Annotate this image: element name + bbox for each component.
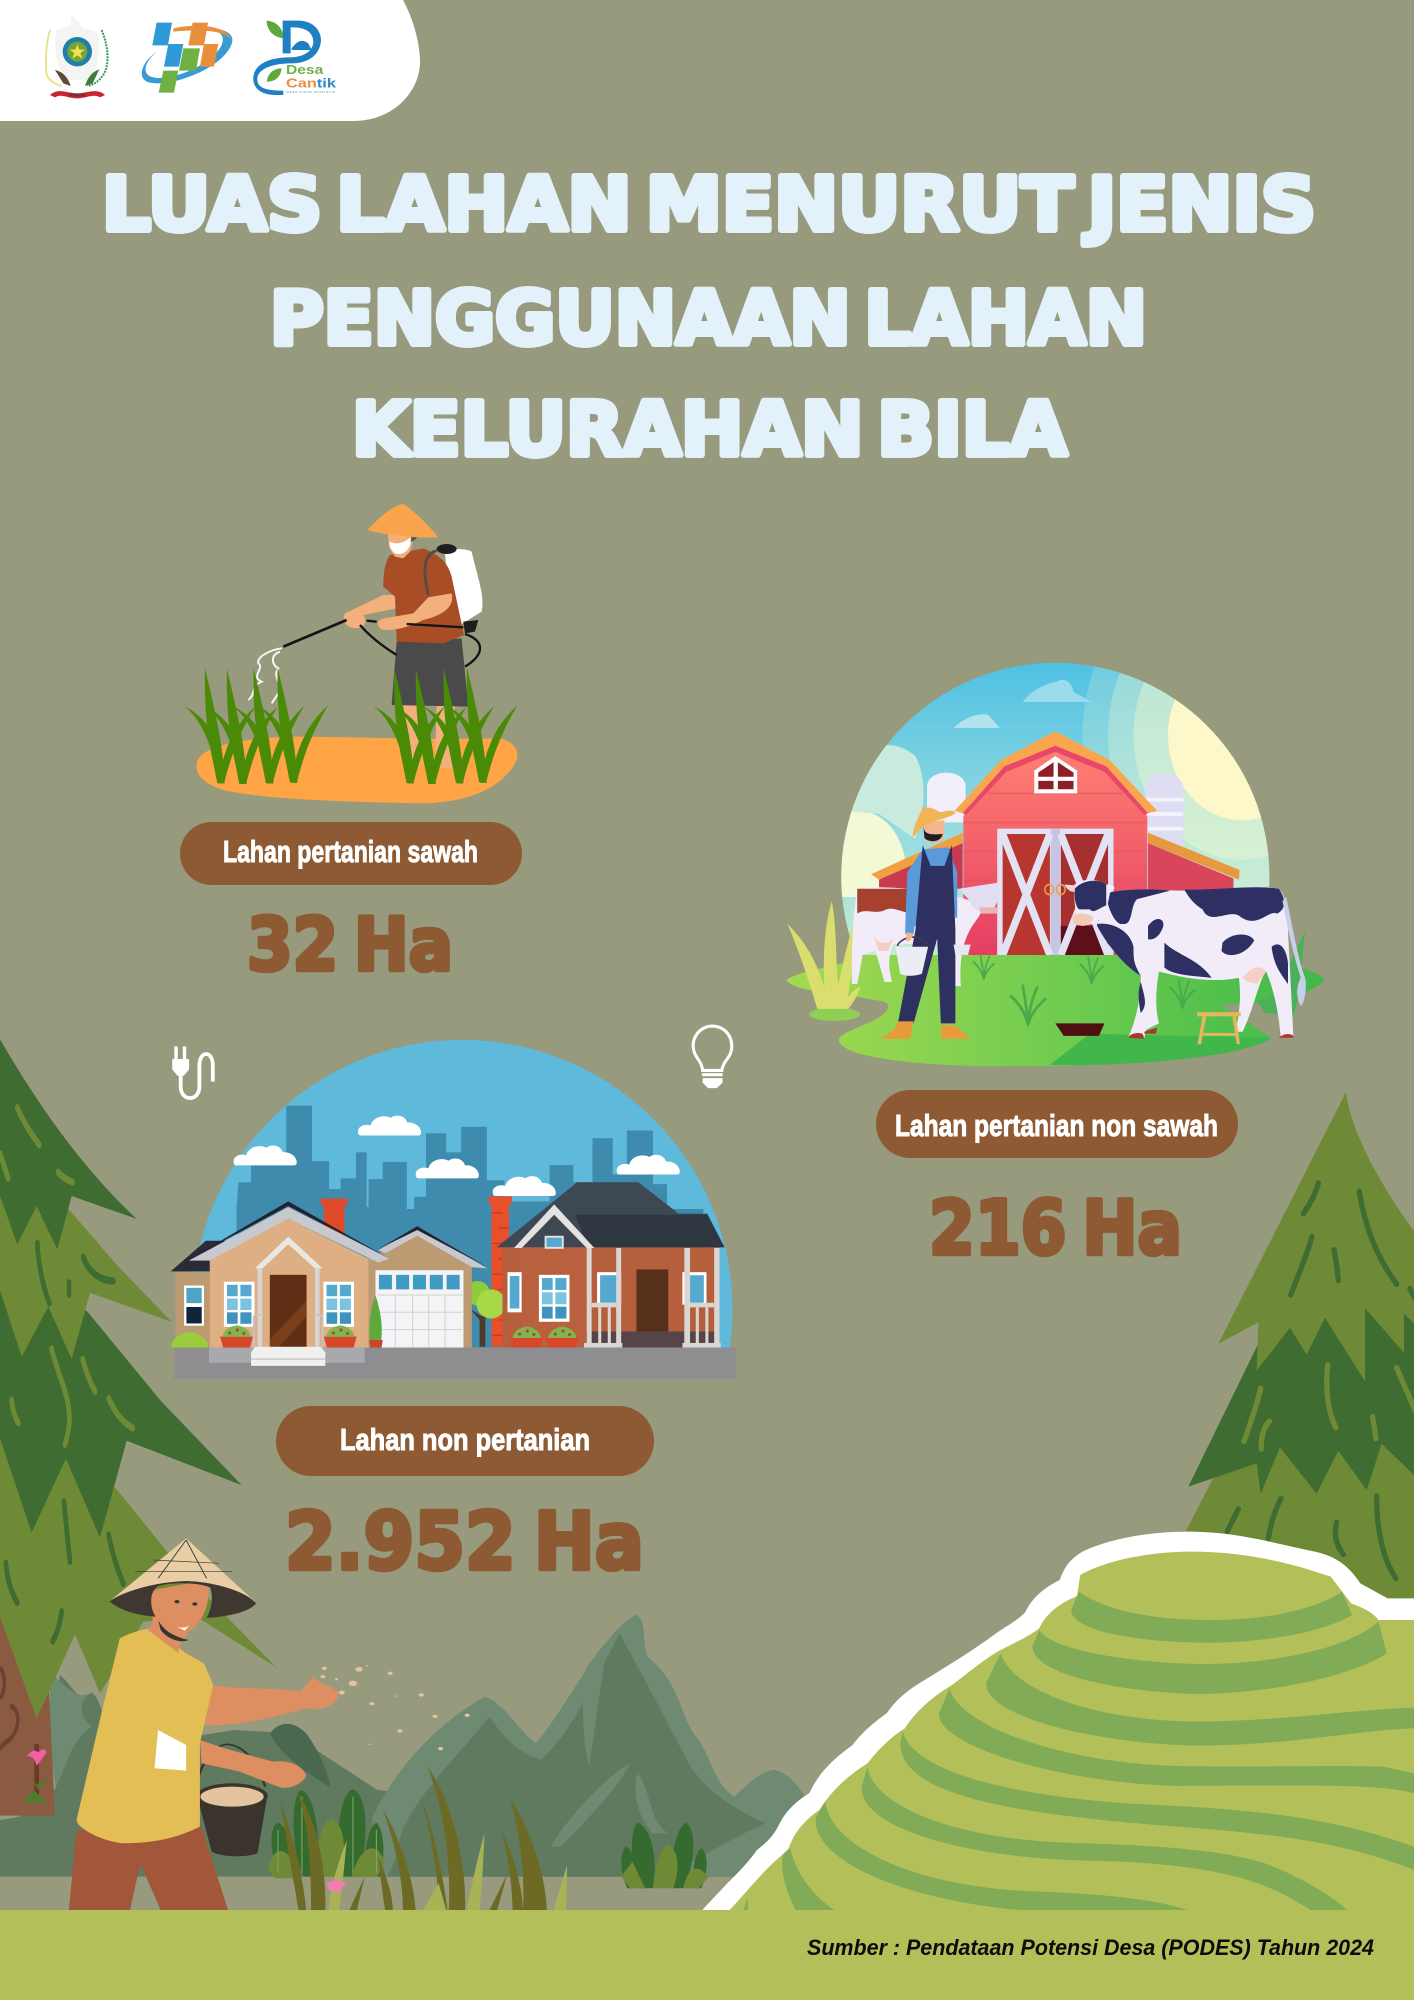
label pill xyxy=(876,1090,1238,1158)
trough xyxy=(1055,1023,1104,1036)
cypress xyxy=(369,1295,382,1340)
mountains xyxy=(0,1615,826,1877)
title xyxy=(102,162,1316,473)
pocket xyxy=(155,1730,186,1771)
panel: lahan non pertanian xyxy=(171,1026,736,1588)
garage house xyxy=(369,1234,472,1349)
logo: Desa Cantik: DESA CINTA STATISTIK xyxy=(287,90,335,94)
left tree xyxy=(0,1039,277,1816)
hill white outline xyxy=(702,1532,1414,1913)
value: 216 Ha xyxy=(929,1184,1182,1272)
label text: Lahan pertanian sawah xyxy=(223,834,478,869)
hill body xyxy=(730,1552,1414,1913)
label pill xyxy=(276,1406,654,1476)
small cow xyxy=(852,882,999,986)
right tree xyxy=(1185,1092,1414,1617)
logo: regency emblem xyxy=(46,13,108,98)
farmer xyxy=(881,807,971,1039)
soil xyxy=(197,737,517,803)
front arm xyxy=(204,1676,338,1725)
icon: light bulb xyxy=(693,1026,732,1088)
back arm xyxy=(200,1740,306,1788)
terrace stripes xyxy=(743,1592,1414,1910)
shirt xyxy=(76,1628,213,1843)
tree trunk xyxy=(0,1581,55,1816)
illustration: houses and city xyxy=(170,1040,736,1380)
bush xyxy=(171,1332,208,1348)
logo panel xyxy=(0,0,420,121)
right bush xyxy=(621,1823,709,1888)
ground strip xyxy=(0,1910,1414,2000)
big cow xyxy=(1064,880,1306,1039)
panel: lahan pertanian sawah xyxy=(180,504,522,988)
main house xyxy=(171,1241,237,1271)
source note: Sumber : Pendataan Potensi Desa (PODES) Tahun 2024 xyxy=(807,1935,1374,1960)
panel: lahan pertanian non sawah xyxy=(786,662,1324,1258)
sky dome with skyline xyxy=(194,1040,732,1348)
illustration: barn and cows xyxy=(786,662,1324,1066)
label pill xyxy=(180,822,522,885)
chimneys xyxy=(321,1199,348,1236)
left bush xyxy=(268,1789,385,1878)
logo: regency emblem: SOPPENG xyxy=(69,93,86,97)
logo: Desa Cantik: Cantik xyxy=(286,75,337,90)
logo: Desa Cantik xyxy=(253,21,337,95)
title: LUAS LAHAN MENURUT JENIS xyxy=(102,162,1316,248)
seeds xyxy=(320,1665,470,1750)
label text: Lahan non pertanian xyxy=(340,1422,590,1457)
label text: Lahan pertanian non sawah xyxy=(895,1108,1218,1143)
head xyxy=(148,1580,208,1653)
terraced hill xyxy=(702,1532,1414,1913)
logo: Desa Cantik: Desa xyxy=(286,63,324,77)
title: KELURAHAN BILA xyxy=(352,387,1067,473)
pavement xyxy=(175,1348,736,1379)
value: 2.952 Ha xyxy=(285,1496,644,1588)
ground xyxy=(786,955,1324,1066)
right house xyxy=(503,1247,719,1348)
grass blades xyxy=(280,1767,547,1910)
value: 32 Ha xyxy=(247,903,453,988)
foreground plants and grass xyxy=(268,1767,709,1910)
left grass tuft xyxy=(787,901,861,1009)
sky dome xyxy=(841,662,1270,955)
illustration: farmer spraying rice xyxy=(184,504,518,803)
small flower xyxy=(23,1744,50,1803)
trousers xyxy=(69,1827,228,1910)
logo: BPS xyxy=(142,23,232,93)
bucket xyxy=(196,1744,268,1856)
conical hat xyxy=(110,1538,256,1618)
tree xyxy=(470,1307,489,1347)
stool xyxy=(1197,1012,1241,1044)
title: PENGGUNAAN LAHAN xyxy=(270,276,1147,362)
farmer sowing seeds xyxy=(69,1538,470,1910)
icon: plug xyxy=(172,1046,213,1098)
